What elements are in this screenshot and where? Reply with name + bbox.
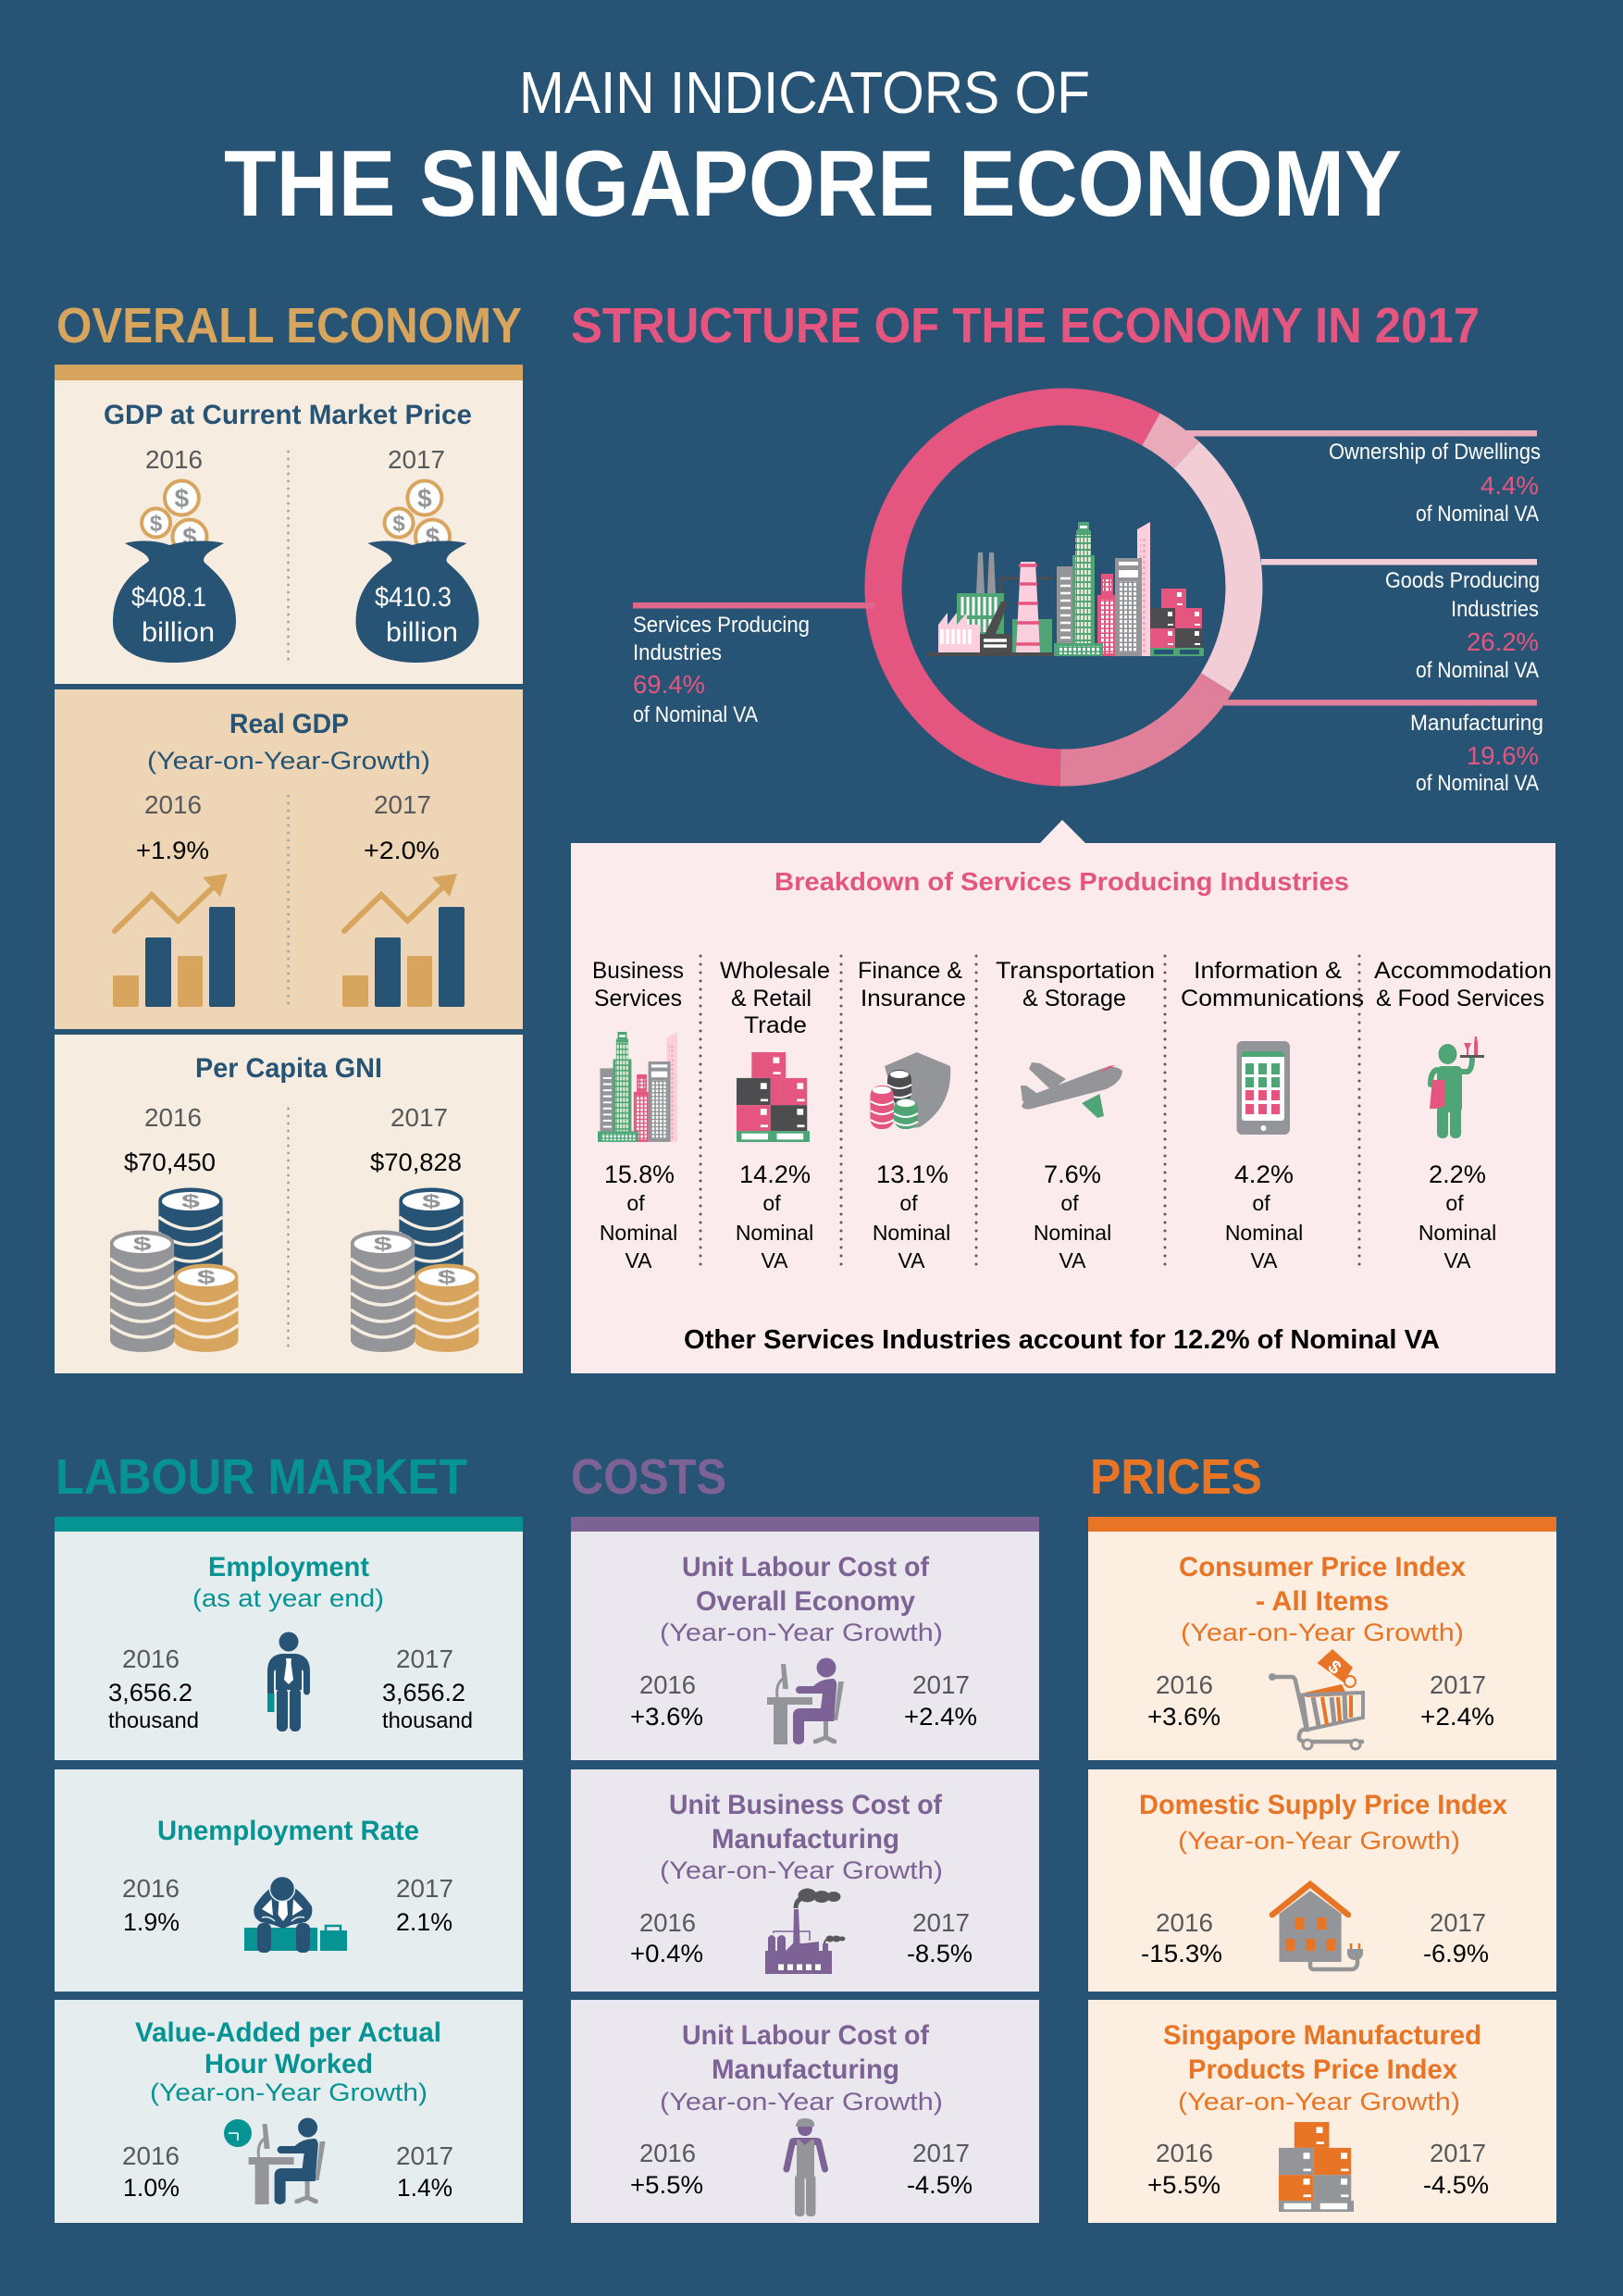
2017 label: 2017 <box>390 1103 448 1132</box>
icon: house with plug <box>1272 1884 1363 1969</box>
column: business services: 15.8% <box>604 1160 675 1188</box>
value 2017: $410.3 <box>375 582 452 613</box>
column: finance and insurance <box>858 958 966 1272</box>
label: services producing industries <box>633 613 810 727</box>
icon: coin stacks 2017 <box>351 1188 478 1352</box>
column: information and communications: 4.2% <box>1234 1160 1294 1188</box>
heading: prices: PRICES <box>1090 1449 1262 1505</box>
column: finance and insurance: Finance & <box>858 958 962 984</box>
column: business services <box>592 958 684 1272</box>
value 2017: 2017 <box>1430 2139 1486 2167</box>
panel heading: GDP at Current Market Price <box>104 400 472 430</box>
column: wholesale and retail trade: Wholesale <box>720 958 830 984</box>
column: transportation and storage: of <box>1060 1191 1079 1215</box>
value 2016: 2016 <box>1156 2139 1213 2167</box>
value 2016: +3.6% <box>1147 1703 1220 1731</box>
panel subheading: (Year-on-Year Growth) <box>1181 1619 1464 1646</box>
value 2016: 1.9% <box>123 1908 180 1936</box>
value 2016: +5.5% <box>1147 2171 1220 2199</box>
2017 label: 2017 <box>374 790 431 819</box>
value 2016 <box>122 1874 180 1936</box>
icon: shopping cart: $ <box>1324 1657 1344 1679</box>
value 2017 <box>1423 1908 1489 1967</box>
panel: unit business cost of manufacturing <box>571 1769 1039 1992</box>
value 2017: 2017 <box>1430 1670 1486 1699</box>
value 2016: +3.6% <box>630 1703 703 1731</box>
panel: employment <box>55 1532 523 1760</box>
column: business services: Nominal <box>600 1221 677 1245</box>
value 2016 <box>1141 1908 1222 1967</box>
panel heading <box>1179 1552 1466 1617</box>
column: transportation and storage: 7.6% <box>1044 1160 1101 1188</box>
icon: city skyline <box>927 522 1204 656</box>
value 2016 <box>108 1644 199 1733</box>
column: information and communications <box>1181 958 1364 1272</box>
icon: plane <box>1021 1062 1122 1118</box>
panel: real GDP <box>55 689 523 1029</box>
panel heading: - All Items <box>1256 1586 1389 1617</box>
column: finance and insurance: Nominal <box>873 1221 950 1245</box>
column: information and communications: Nominal <box>1225 1221 1303 1245</box>
column: accommodation and food services: Accommodation <box>1374 958 1552 984</box>
column: wholesale and retail trade: of <box>762 1191 781 1215</box>
icon: factory worker <box>787 2118 825 2216</box>
title: MAIN INDICATORS OF <box>519 59 1090 126</box>
column: information and communications: Information & <box>1194 958 1342 984</box>
column: wholesale and retail trade: 14.2% <box>739 1160 811 1188</box>
value 2017: +2.4% <box>1420 1703 1494 1731</box>
value 2017 <box>375 582 458 648</box>
value 2016: +5.5% <box>630 2171 703 2199</box>
icon: stacked boxes <box>1279 2122 1354 2212</box>
column: wholesale and retail trade: & Retail <box>731 986 812 1011</box>
value 2016: 2016 <box>639 1670 696 1699</box>
panel subheading: (Year-on-Year Growth) <box>660 1856 943 1884</box>
value 2016: 2016 <box>122 2141 180 2170</box>
icon: growth chart 2017 <box>342 874 465 1007</box>
column: finance and insurance: Insurance <box>861 986 966 1011</box>
panel: value-added per actual hour worked <box>55 2000 523 2223</box>
value 2017 <box>396 2141 453 2202</box>
icon: money bag 2016 <box>113 481 236 663</box>
panel heading: Unit Labour Cost of <box>682 2020 930 2051</box>
value 2017 <box>1423 2139 1489 2199</box>
column: transportation and storage: & Storage <box>1022 986 1126 1011</box>
panel subheading: (Year-on-Year Growth) <box>150 2079 427 2106</box>
panel heading: Breakdown of Services Producing Industries <box>774 867 1349 896</box>
label: ownership of dwellings: 4.4% <box>1481 471 1539 500</box>
value 2017: 2017 <box>396 1644 453 1673</box>
value 2017: -8.5% <box>907 1940 973 1967</box>
panel: unemployment rate <box>55 1769 523 1992</box>
value 2016: $70,450 <box>124 1148 216 1176</box>
panel heading: Consumer Price Index <box>1179 1552 1466 1582</box>
value 2017: 3,656.2 <box>382 1679 465 1706</box>
value 2017: 2.1% <box>396 1908 452 1936</box>
accent bar: prices <box>1088 1517 1556 1532</box>
column: accommodation and food services: & Food Services <box>1376 986 1544 1011</box>
icon: shield and coins <box>870 1052 950 1129</box>
2016 label: 2016 <box>144 790 202 819</box>
value 2016 <box>630 1908 703 1967</box>
panel heading <box>135 2017 441 2079</box>
panel heading: Manufacturing <box>712 1824 899 1855</box>
accent bar: labour market <box>55 1517 523 1532</box>
column: accommodation and food services <box>1374 958 1552 1272</box>
value 2017 <box>396 1874 453 1936</box>
value 2016: 2016 <box>1156 1908 1213 1937</box>
icon: money bag 2017 <box>355 481 479 663</box>
value 2016: thousand <box>108 1708 199 1733</box>
heading: structure of the economy: STRUCTURE OF THE ECONOMY IN 2017 <box>571 298 1480 354</box>
panel subheading: (Year-on-Year Growth) <box>1178 1827 1460 1855</box>
column: wholesale and retail trade: Nominal <box>736 1221 813 1245</box>
panel heading: Products Price Index <box>1188 2054 1457 2085</box>
label: goods producing industries: of Nominal VA <box>1416 658 1539 683</box>
panel subheading: (Year-on-Year Growth) <box>1178 2088 1460 2116</box>
column: finance and insurance: VA <box>898 1248 925 1272</box>
panel: consumer price index <box>1088 1532 1556 1760</box>
leader line: ownership of dwellings <box>1186 430 1537 437</box>
panel: domestic supply price index <box>1088 1769 1556 1992</box>
column: wholesale and retail trade <box>720 958 830 1272</box>
value 2017 <box>1420 1670 1494 1731</box>
leader line: goods producing <box>1261 559 1537 565</box>
value 2017 <box>907 2139 973 2199</box>
value 2016: 2016 <box>639 2139 696 2167</box>
panel: breakdown of services producing industries <box>571 820 1555 1373</box>
value 2016: 1.0% <box>123 2174 180 2202</box>
value 2017: -4.5% <box>907 2171 973 2199</box>
column: accommodation and food services: VA <box>1444 1248 1471 1272</box>
panel: unit labour cost of manufacturing <box>571 2000 1039 2223</box>
label: goods producing industries: Goods Producing <box>1385 568 1540 593</box>
column: information and communications: of <box>1252 1191 1270 1215</box>
value 2017: -6.9% <box>1423 1940 1489 1967</box>
value 2017 <box>907 1908 973 1967</box>
value 2017: thousand <box>382 1708 473 1733</box>
value 2016: $408.1 <box>131 582 206 613</box>
accent bar: costs <box>571 1517 1039 1532</box>
panel heading: Employment <box>208 1552 369 1582</box>
panel subheading: (Year-on-Year-Growth) <box>147 747 430 775</box>
icon: waiter <box>1430 1036 1484 1138</box>
label: goods producing industries: Industries <box>1451 597 1539 622</box>
panel subheading: (Year-on-Year Growth) <box>660 1619 943 1646</box>
column: accommodation and food services: Nominal <box>1419 1221 1496 1245</box>
value 2017: -4.5% <box>1423 2171 1489 2199</box>
value 2017: billion <box>386 617 458 648</box>
label: services producing industries: Industries <box>633 640 722 665</box>
panel subheading: (as at year end) <box>192 1584 384 1612</box>
label: goods producing industries: 26.2% <box>1467 627 1539 656</box>
value 2017: $70,828 <box>370 1148 462 1176</box>
panel heading: Singapore Manufactured <box>1163 2020 1481 2051</box>
column: accommodation and food services: 2.2% <box>1429 1160 1486 1188</box>
column: transportation and storage: Nominal <box>1034 1221 1111 1245</box>
value 2016 <box>1147 2139 1220 2199</box>
panel heading: Unemployment Rate <box>157 1816 419 1846</box>
column: business services: of <box>626 1191 645 1215</box>
panel heading <box>669 1790 943 1855</box>
column: information and communications: VA <box>1251 1248 1278 1272</box>
value 2016 <box>630 1670 703 1731</box>
column: business services: Services <box>594 986 682 1011</box>
column: information and communications: Communications <box>1181 986 1364 1011</box>
icon: office worker <box>267 1632 310 1731</box>
panel heading <box>682 2020 930 2085</box>
value 2016 <box>131 582 215 648</box>
heading: costs: COSTS <box>571 1449 726 1505</box>
icon: smartphone <box>1236 1041 1290 1135</box>
2016 label: 2016 <box>144 1103 202 1132</box>
value 2016: +1.9% <box>136 837 209 864</box>
icon: coin stacks 2016 <box>110 1188 238 1352</box>
value 2017: 2017 <box>396 2141 453 2170</box>
panel: singapore manufactured products price index <box>1088 2000 1556 2223</box>
value 2017: 2017 <box>912 2139 970 2167</box>
panel heading: Manufacturing <box>712 2054 899 2085</box>
label: manufacturing: Manufacturing <box>1410 711 1543 736</box>
2017 label: 2017 <box>388 445 445 474</box>
heading: overall economy: OVERALL ECONOMY <box>56 298 522 354</box>
column: finance and insurance: 13.1% <box>876 1160 948 1188</box>
value 2016: 2016 <box>1156 1670 1213 1699</box>
column: accommodation and food services: of <box>1445 1191 1464 1215</box>
value 2017: +2.4% <box>904 1703 977 1731</box>
value 2017: 2017 <box>912 1908 970 1937</box>
icon: desk worker <box>767 1658 844 1744</box>
label: goods producing industries <box>1385 568 1540 683</box>
label: services producing industries: of Nominal VA <box>633 702 758 727</box>
panel subheading: (Year-on-Year Growth) <box>660 2088 943 2116</box>
value 2016 <box>630 2139 703 2199</box>
panel heading <box>1163 2020 1481 2085</box>
panel heading: Value-Added per Actual <box>135 2017 441 2048</box>
label: services producing industries: 69.4% <box>633 670 705 699</box>
value 2016 <box>122 2141 180 2202</box>
panel: unit labour cost of overall economy <box>571 1532 1039 1760</box>
value 2016: -15.3% <box>1141 1940 1222 1967</box>
icon: growth chart 2016 <box>113 874 235 1007</box>
panel heading: Per Capita GNI <box>195 1053 382 1084</box>
label: manufacturing <box>1410 711 1543 796</box>
panel: GDP at current market price <box>55 380 523 684</box>
value 2017: 1.4% <box>397 2174 452 2202</box>
column: transportation and storage: VA <box>1059 1248 1086 1272</box>
donut chart <box>864 389 1262 787</box>
panel heading: Overall Economy <box>696 1586 915 1617</box>
icon: desk worker <box>249 2117 326 2204</box>
column: business services: Business <box>592 958 684 984</box>
value 2016: +0.4% <box>630 1940 703 1967</box>
value 2016: 3,656.2 <box>108 1679 192 1706</box>
panel heading: Domestic Supply Price Index <box>1139 1790 1507 1820</box>
panel heading: Unit Labour Cost of <box>682 1552 930 1582</box>
accent bar: overall economy <box>55 365 523 380</box>
column: wholesale and retail trade: VA <box>762 1248 788 1272</box>
label: ownership of dwellings <box>1329 440 1541 527</box>
icon: clock <box>224 2119 252 2147</box>
note: other services industries: Other Services Industries account for 12.2% of Nominal VA <box>684 1325 1440 1355</box>
panel heading: Unit Business Cost of <box>669 1790 943 1820</box>
title: THE SINGAPORE ECONOMY <box>224 132 1402 236</box>
value 2017: +2.0% <box>364 837 440 864</box>
icon: factory <box>765 1888 846 1974</box>
value 2016: 2016 <box>639 1908 696 1937</box>
label: ownership of dwellings: of Nominal VA <box>1416 502 1539 527</box>
value 2017 <box>382 1644 473 1733</box>
label: ownership of dwellings: Ownership of Dwellings <box>1329 440 1541 465</box>
leader line: services producing <box>633 602 875 609</box>
value 2016: 2016 <box>122 1644 180 1673</box>
heading: labour market: LABOUR MARKET <box>56 1449 467 1505</box>
value 2017: 2017 <box>1430 1908 1486 1937</box>
panel heading: Hour Worked <box>204 2049 373 2079</box>
panel heading <box>682 1552 930 1617</box>
value 2017: 2017 <box>912 1670 970 1699</box>
column: business services: VA <box>626 1248 652 1272</box>
icon: unemployed man on bench <box>244 1877 347 1953</box>
2016 label: 2016 <box>145 445 203 474</box>
title <box>224 59 1402 236</box>
icon: shopping cart <box>1269 1649 1363 1749</box>
panel: per capita GNI <box>55 1035 523 1373</box>
value 2017 <box>904 1670 977 1731</box>
value 2016 <box>1147 1670 1220 1731</box>
column: wholesale and retail trade: Trade <box>744 1012 807 1038</box>
column: transportation and storage <box>996 958 1155 1272</box>
value 2017: 2017 <box>396 1874 453 1903</box>
leader line: manufacturing <box>1224 700 1537 705</box>
column: transportation and storage: Transportation <box>996 958 1155 984</box>
label: manufacturing: 19.6% <box>1467 741 1539 770</box>
label: services producing industries: Services Producing <box>633 613 810 638</box>
value 2016: 2016 <box>122 1874 180 1903</box>
panel heading: Real GDP <box>229 709 349 739</box>
column: finance and insurance: of <box>899 1191 918 1215</box>
value 2016: billion <box>142 617 215 648</box>
label: manufacturing: of Nominal VA <box>1416 771 1539 796</box>
